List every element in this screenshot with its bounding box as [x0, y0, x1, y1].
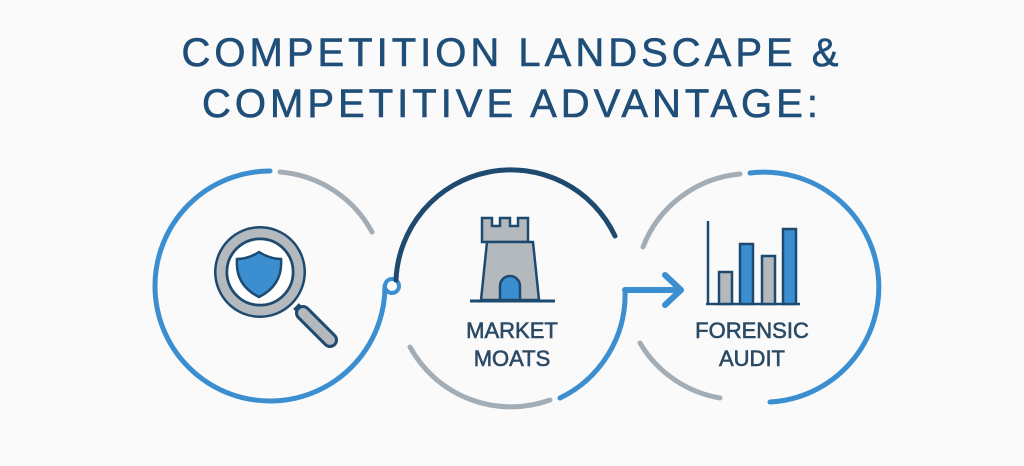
title	[182, 31, 842, 126]
label: forensic audit: AUDIT	[719, 346, 785, 371]
label: market moats: MARKET	[466, 318, 558, 343]
label: market moats	[466, 318, 558, 371]
icon: magnifier with shield	[221, 233, 330, 340]
title: COMPETITION LANDSCAPE &	[182, 31, 842, 75]
arrow	[625, 275, 681, 305]
icon: bar chart	[706, 221, 800, 304]
circle 3 ring	[640, 172, 879, 402]
circle 2 ring	[396, 170, 625, 407]
circle 1 ring	[155, 171, 385, 401]
title: COMPETITIVE ADVANTAGE:	[202, 82, 822, 126]
connector node	[385, 279, 399, 293]
label: forensic audit: FORENSIC	[695, 318, 809, 343]
icon: castle tower	[470, 218, 555, 301]
label: forensic audit	[695, 318, 809, 371]
label: market moats: MOATS	[474, 346, 550, 371]
